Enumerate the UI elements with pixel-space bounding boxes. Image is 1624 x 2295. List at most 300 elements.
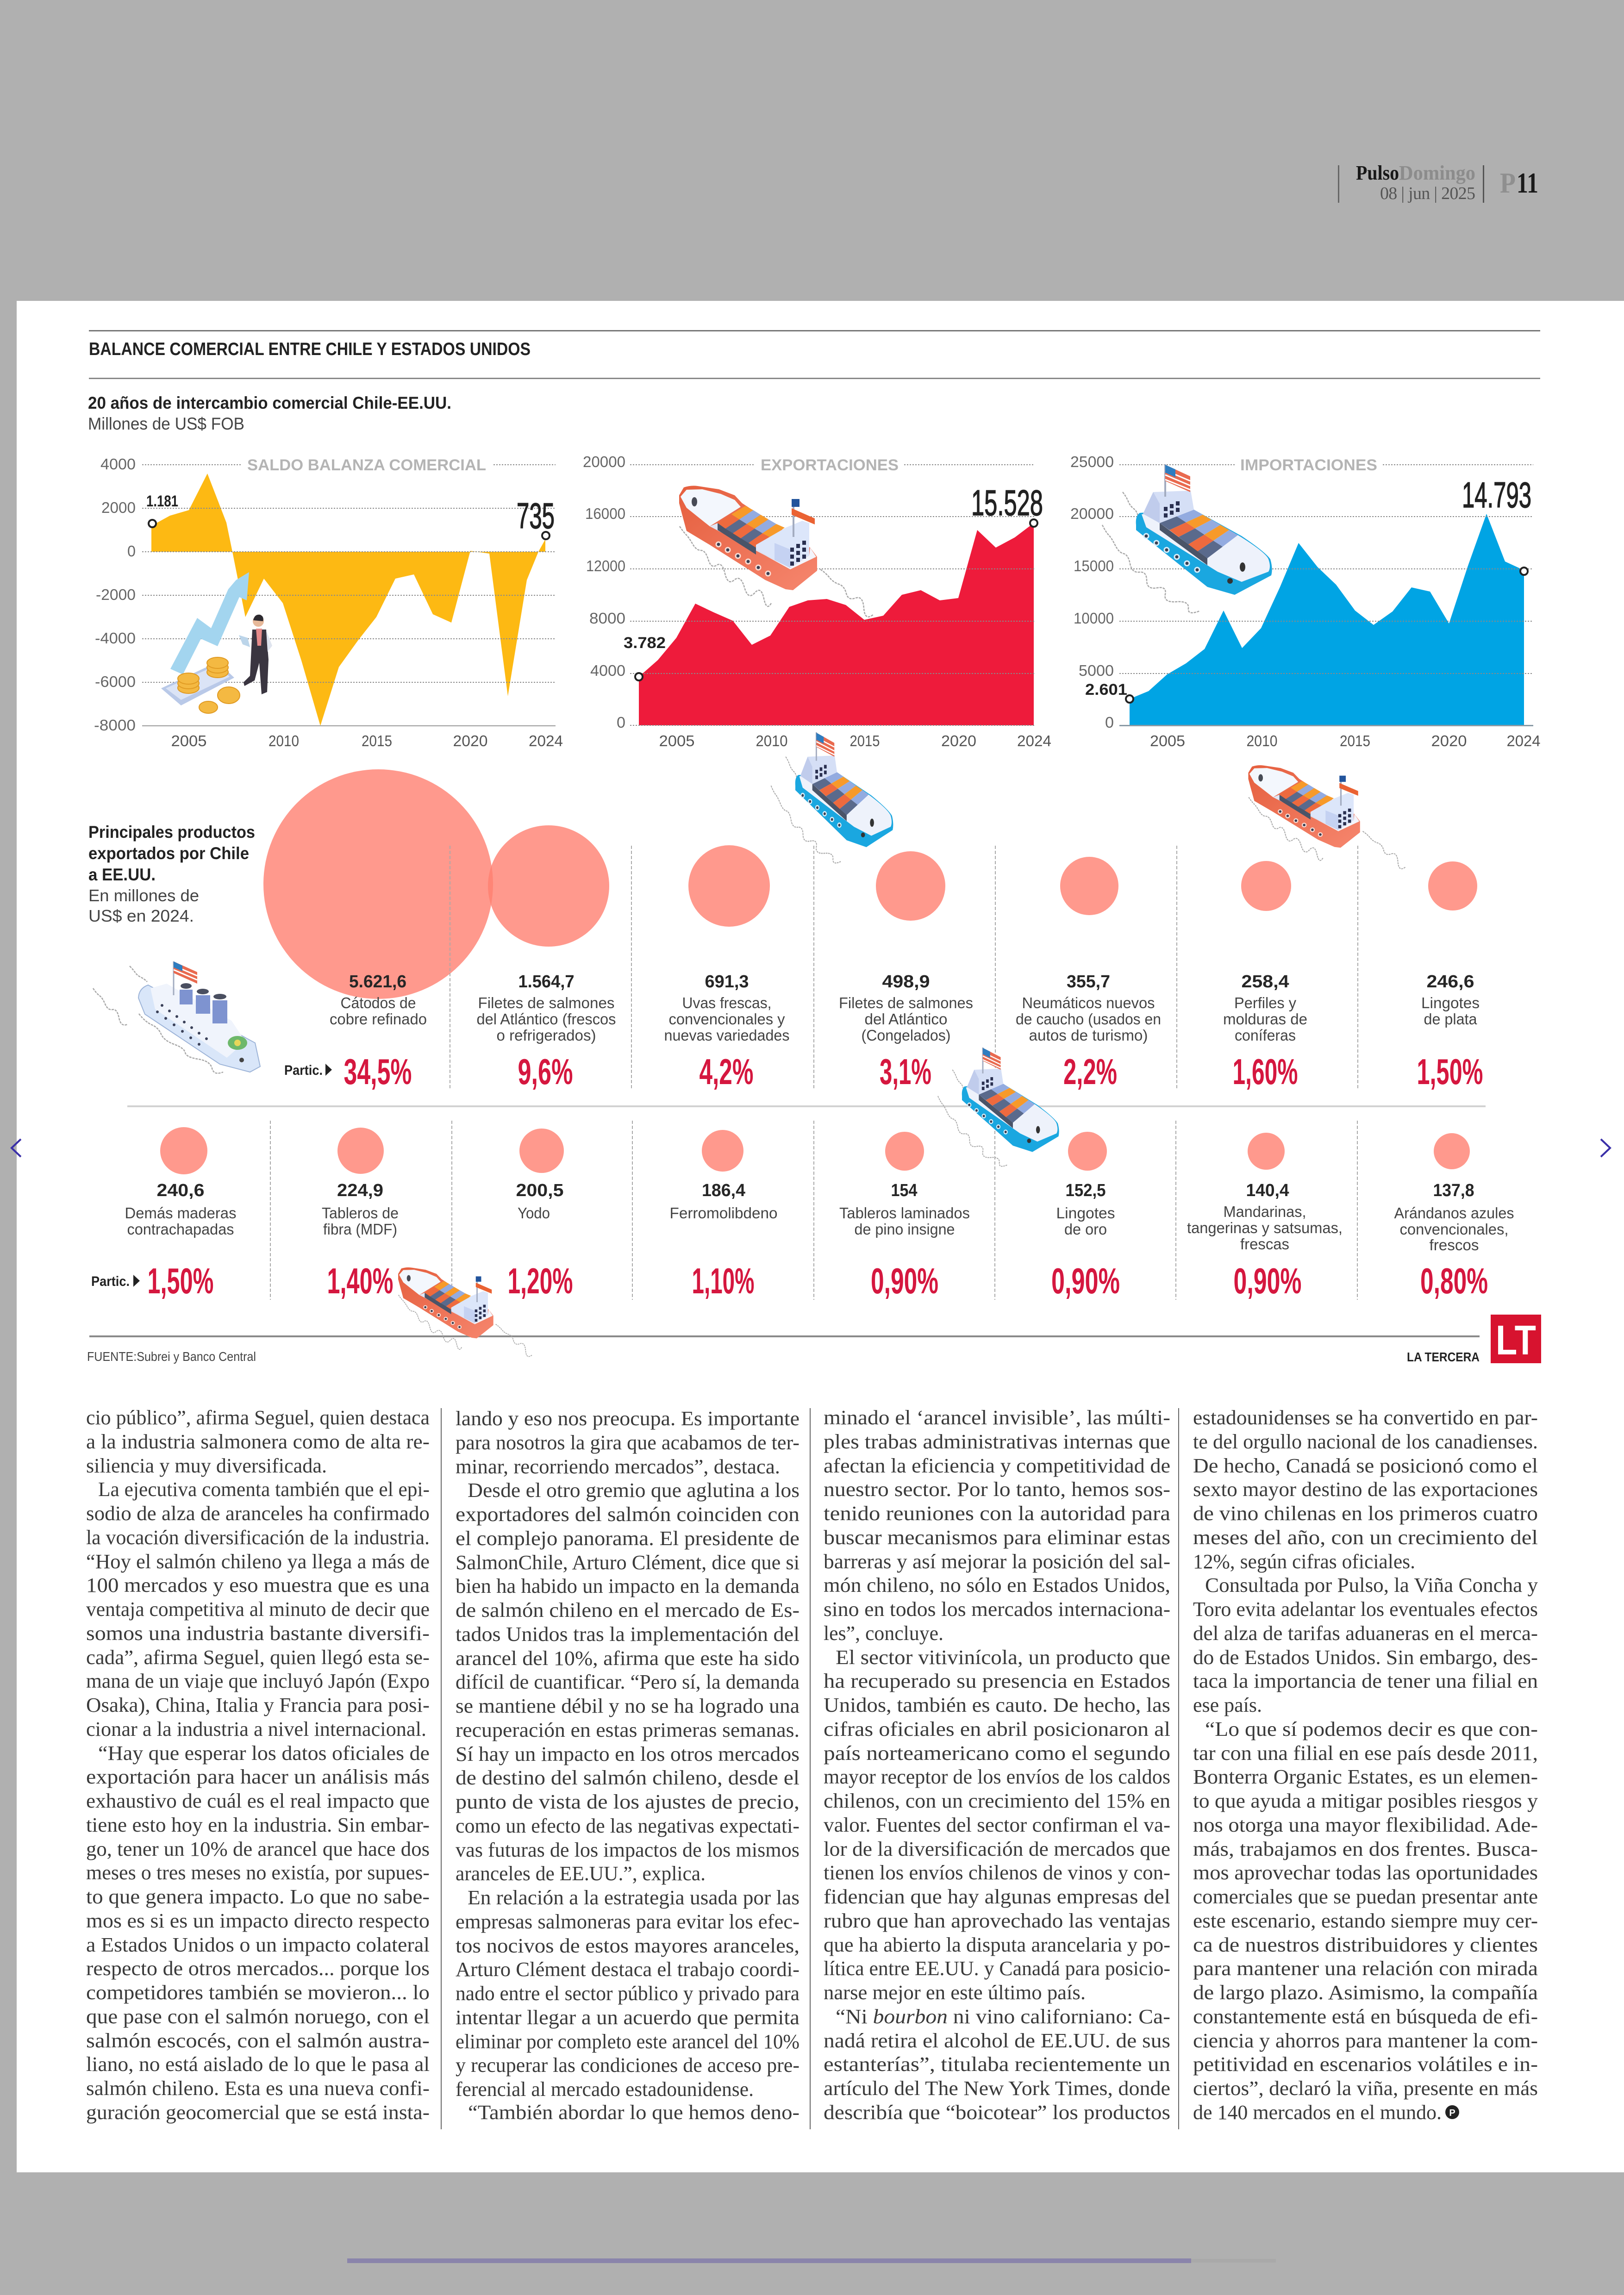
y axis labels: 8000 bbox=[589, 610, 625, 627]
footer rule bbox=[89, 1335, 1480, 1337]
product 10: yodo: 1,20% bbox=[507, 1260, 573, 1301]
article column 3: El sector vitivinícola, un producto que bbox=[836, 1646, 1170, 1669]
product 11: ferromolibdeno: 1,10% bbox=[692, 1260, 755, 1301]
x axis labels: 2005 bbox=[1150, 732, 1185, 749]
chart label: IMPORTACIONES bbox=[1240, 456, 1377, 474]
product 2: salmones frescos: Filetes de salmones bbox=[478, 994, 615, 1011]
x axis labels: 2024 bbox=[529, 732, 563, 749]
product 11: ferromolibdeno bbox=[669, 1130, 778, 1301]
product 12: tableros laminados: 154 bbox=[891, 1181, 918, 1200]
chart: saldo balanza comercial bbox=[94, 455, 563, 749]
article column 2: Desde el otro gremio que aglutina a los bbox=[468, 1479, 800, 1502]
article column 2: minar, recorriendo mercados”, destaca. bbox=[456, 1455, 780, 1478]
product 8: maderas: contrachapadas bbox=[127, 1221, 234, 1238]
icon: businessman, rising arrow and coins bbox=[161, 572, 272, 713]
x axis labels: 2010 bbox=[269, 732, 299, 749]
page progress bar bbox=[347, 2258, 1276, 2263]
article column 2: lando y eso nos preocupa. Es importante bbox=[456, 1407, 800, 1430]
article column 1: salmón chileno. Esta es una nueva confi- bbox=[86, 2077, 430, 2100]
article column 4: De hecho, Canadá se posicionó como el bbox=[1193, 1454, 1538, 1477]
page header: Pulso Domingo: 08 | jun | 2025 bbox=[1380, 184, 1475, 203]
article column 3: lítica entre EE.UU. y Canadá para posicio- bbox=[824, 1957, 1170, 1980]
label: participación row 1: Partic. bbox=[284, 1063, 323, 1078]
article column 3: rubro que han aprovechado las ventajas bbox=[824, 1909, 1170, 1932]
article column 4: ese país. bbox=[1193, 1694, 1262, 1716]
article column 2: de salmón chileno en el mercado de Es- bbox=[456, 1599, 800, 1621]
y axis labels: 25000 bbox=[1070, 453, 1114, 470]
start value 1.181: 1.181 bbox=[146, 493, 178, 510]
article column 3: describía que “boicotear” los productos bbox=[824, 2101, 1170, 2124]
product 13: oro bbox=[1051, 1132, 1120, 1301]
x axis labels: 2024 bbox=[1506, 732, 1541, 749]
article column 1: “Hay que esperar los datos oficiales de bbox=[98, 1742, 430, 1765]
y axis labels bbox=[1070, 453, 1114, 731]
product 5: neumáticos: Neumáticos nuevos bbox=[1022, 994, 1155, 1011]
article column 4: de 140 mercados en el mundo. bbox=[1193, 2101, 1442, 2124]
product 9: MDF: fibra (MDF) bbox=[323, 1221, 397, 1238]
article column 2: empresas salmoneras para evitar los efec- bbox=[456, 1910, 800, 1933]
article column 4: constantemente está en búsqueda de efi- bbox=[1193, 2005, 1538, 2028]
article column 1: a Estados Unidos o un impacto colateral bbox=[86, 1933, 430, 1956]
icon: next page chevron bbox=[1601, 1139, 1610, 1157]
product 14: mandarinas bbox=[1187, 1133, 1343, 1301]
article column 2: Arturo Clément destaca el trabajo coordi- bbox=[456, 1958, 800, 1981]
y axis labels: 4000 bbox=[590, 662, 625, 679]
article column 1: Osaka), China, Italia y Francia para posi- bbox=[86, 1694, 430, 1716]
product 9: MDF: 224,9 bbox=[337, 1181, 383, 1200]
article column 1: “Hoy el salmón chileno ya llega a más de bbox=[86, 1550, 430, 1573]
article column 1: que pase con el salmón noruego, con el bbox=[86, 2005, 430, 2028]
article column 1: la vocación diversificación de la industria. bbox=[86, 1526, 430, 1549]
article column 4: más, trabajamos en dos frentes. Busca- bbox=[1193, 1838, 1538, 1860]
product 7: plata bbox=[1417, 861, 1483, 1092]
product 3: uvas: nuevas variedades bbox=[664, 1027, 790, 1044]
end value 735: 735 bbox=[517, 495, 555, 536]
icon: red container ship, bottom row bbox=[398, 1267, 532, 1357]
product 2: salmones frescos: del Atlántico (frescos bbox=[477, 1010, 616, 1028]
article column 1: mana de un viaje que incluyó Japón (Expo bbox=[86, 1670, 430, 1692]
article column 4: del alza de tarifas aduaneras en el merca- bbox=[1193, 1622, 1538, 1645]
product 15: arándanos: convencionales, bbox=[1400, 1221, 1508, 1238]
product 1: cobre: cobre refinado bbox=[330, 1010, 427, 1028]
product 8: maderas: 240,6 bbox=[156, 1181, 205, 1200]
product 10: yodo bbox=[507, 1129, 573, 1301]
end value 15.528 bbox=[971, 482, 1043, 527]
start value 2.601 bbox=[1085, 681, 1133, 703]
product 1: cobre: Cátodos de bbox=[341, 994, 416, 1011]
article column 3: Unidos, también es cauto. De hecho, las bbox=[824, 1694, 1170, 1716]
article column 2: nado entre el sector público y privado para bbox=[456, 1982, 800, 2005]
icon: previous page chevron bbox=[12, 1139, 21, 1157]
article column 3: chilenos, con un crecimiento del 15% en bbox=[824, 1790, 1170, 1812]
product 15: arándanos: 0,80% bbox=[1420, 1260, 1488, 1301]
chart subtitle: 20 años de intercambio comercial Chile-EE.UU. bbox=[88, 393, 451, 412]
article column 2: intentar llegar a un acuerdo que permita bbox=[456, 2006, 800, 2029]
product 3: uvas: 4,2% bbox=[699, 1051, 754, 1092]
article column 1: cio público”, afirma Seguel, quien destaca bbox=[86, 1406, 430, 1429]
y axis labels: 20000 bbox=[583, 453, 625, 470]
product 4: salmones congelados: del Atlántico bbox=[865, 1010, 947, 1028]
product 1: cobre: 34,5% bbox=[344, 1051, 412, 1092]
article column 4: to que ayuda a mitigar posibles riesgos y bbox=[1193, 1790, 1538, 1812]
article column 4: comerciales que se puedan presentar ante bbox=[1193, 1885, 1538, 1908]
article column 4: “Lo que sí podemos decir es que con- bbox=[1205, 1718, 1538, 1740]
product 13: oro: de oro bbox=[1064, 1221, 1107, 1238]
page header: Pulso Domingo: Domingo bbox=[1399, 162, 1475, 184]
x axis labels: 2020 bbox=[1431, 732, 1467, 749]
article column 2: eliminar por completo este arancel del 10% bbox=[456, 2030, 800, 2053]
article column 1: meses o tres meses no existía, por supues- bbox=[86, 1861, 430, 1884]
article column 4: de largo plazo. Asimismo, la compañía bbox=[1193, 1981, 1538, 2004]
x axis labels: 2005 bbox=[171, 732, 206, 749]
x axis labels bbox=[1150, 732, 1541, 749]
page header: Pulso Domingo bbox=[1338, 162, 1538, 203]
article column 4: Toro evita adelantar los eventuales efectos bbox=[1193, 1598, 1538, 1621]
product 11: ferromolibdeno: 186,4 bbox=[702, 1181, 745, 1200]
article column 3: fidencian que hay algunas empresas del bbox=[824, 1885, 1170, 1908]
article column 1: somos una industria bastante diversifi- bbox=[86, 1622, 430, 1645]
article column 2: exportadores del salmón coinciden con bbox=[456, 1503, 800, 1526]
product 12: tableros laminados bbox=[839, 1132, 970, 1301]
product 2: salmones frescos: o refrigerados) bbox=[496, 1027, 596, 1044]
article column 3: país norteamericano como el segundo bbox=[824, 1742, 1170, 1765]
article column 4: de vino chilenas en los primeros cuatro bbox=[1193, 1502, 1538, 1525]
y axis labels: 2000 bbox=[101, 499, 136, 516]
article column 1: a la industria salmonera como de alta re- bbox=[86, 1430, 430, 1453]
product 5: neumáticos: autos de turismo) bbox=[1029, 1027, 1148, 1044]
product 9: MDF: 1,40% bbox=[327, 1260, 394, 1301]
article column 3: sino en todos los mercados internaciona- bbox=[824, 1598, 1170, 1621]
article column 1: mos es si es un impacto directo respecto bbox=[86, 1909, 430, 1932]
product 12: tableros laminados: 0,90% bbox=[871, 1260, 938, 1301]
article column 1: sodio de alza de aranceles ha confirmado bbox=[86, 1502, 430, 1525]
products intro text: a EE.UU. bbox=[88, 865, 156, 884]
article column 3: “Ni bourbon ni vino californiano: Ca- bbox=[836, 2005, 1170, 2028]
start value 3.782 bbox=[624, 634, 666, 680]
start value 2.601: 2.601 bbox=[1085, 681, 1127, 698]
article column 2: “También abordar lo que hemos deno- bbox=[468, 2101, 800, 2124]
article column 3: valor. Fuentes del sector confirman el va- bbox=[824, 1814, 1170, 1836]
article column 4: petitividad en escenarios volátiles e in- bbox=[1193, 2053, 1538, 2076]
chart subtitle: Millones de US$ FOB bbox=[88, 414, 244, 433]
y axis labels: 0 bbox=[617, 714, 625, 731]
y axis labels: 0 bbox=[127, 543, 136, 560]
product 5: neumáticos: 2,2% bbox=[1063, 1051, 1117, 1092]
page header: Pulso Domingo: P bbox=[1500, 168, 1516, 199]
y axis labels: 12000 bbox=[586, 557, 625, 574]
icon: blue container ship on imports chart bbox=[1102, 464, 1272, 613]
article column 3: les”, concluye. bbox=[824, 1622, 943, 1645]
products intro text: En millones de bbox=[88, 886, 199, 905]
icon: blue container ship, top middle bbox=[771, 732, 893, 863]
x axis labels: 2015 bbox=[1340, 732, 1370, 749]
article column 3 bbox=[824, 1406, 1170, 2124]
product 2: salmones frescos: 1.564,7 bbox=[518, 972, 574, 992]
product 11: ferromolibdeno: Ferromolibdeno bbox=[669, 1204, 778, 1222]
article column 3: que ha abierto la disputa arancelaria y po- bbox=[824, 1933, 1170, 1956]
product 6: perfiles bbox=[1223, 861, 1307, 1092]
article column 1: go, tener un 10% de arancel que hace dos bbox=[86, 1838, 430, 1860]
y axis labels: 5000 bbox=[1079, 662, 1114, 679]
article column 2: el complejo panorama. El presidente de bbox=[456, 1527, 800, 1550]
article column 1: La ejecutiva comenta también que el epi- bbox=[98, 1478, 430, 1501]
article column 3: barreras y así mejorar la posición del sal- bbox=[824, 1550, 1170, 1573]
product 14: mandarinas: frescas bbox=[1240, 1235, 1289, 1253]
section heading with rules bbox=[89, 330, 1540, 379]
article column 3: cifras oficiales en abril posicionaron al bbox=[824, 1718, 1170, 1740]
article column 3: ha recuperado su presencia en Estados bbox=[824, 1670, 1170, 1692]
article column 2 bbox=[456, 1407, 800, 2124]
y axis labels: 16000 bbox=[585, 505, 625, 522]
product 14: mandarinas: 0,90% bbox=[1233, 1260, 1302, 1301]
area: exportaciones bbox=[639, 523, 1034, 725]
article column 1: liano, no está aislado de lo que le pasa al bbox=[86, 2053, 430, 2076]
y axis labels bbox=[583, 453, 625, 731]
product 6: perfiles: coníferas bbox=[1235, 1027, 1296, 1044]
product 8: maderas: 1,50% bbox=[147, 1260, 214, 1301]
x axis labels: 2005 bbox=[659, 732, 694, 749]
article column 4: nos otorga una mayor flexibilidad. Ade- bbox=[1193, 1814, 1538, 1836]
article column 1: respecto de otros mercados... porque los bbox=[86, 1957, 430, 1980]
x axis labels: 2024 bbox=[1017, 732, 1051, 749]
article column 4: ca de nuestros distribuidores y clientes bbox=[1193, 1933, 1538, 1956]
article column 2: difícil de cuantificar. “Pero sí, la demanda bbox=[456, 1671, 800, 1693]
article column 1: to que genera impacto. Lo que no sabe- bbox=[86, 1885, 430, 1908]
article column 4: mos aprovechar todas las oportunidades bbox=[1193, 1861, 1538, 1884]
end-of-article mark bbox=[1445, 2105, 1459, 2119]
article column 4: taca la importancia de tener una filial en bbox=[1193, 1670, 1538, 1692]
icon: blue container ship, between rows bbox=[938, 1048, 1059, 1166]
chart: importaciones bbox=[1070, 453, 1541, 749]
icon: cruise ship bbox=[93, 961, 260, 1073]
product 13: oro: 0,90% bbox=[1051, 1260, 1120, 1301]
product 5: neumáticos: de caucho (usados en bbox=[1016, 1010, 1161, 1028]
article column 1: exportación para hacer un análisis más bbox=[86, 1765, 430, 1788]
bubble: cátodos de cobre bbox=[263, 769, 493, 999]
article column 4: este escenario, estando siempre muy cer- bbox=[1193, 1909, 1538, 1932]
y axis labels: 20000 bbox=[1070, 505, 1114, 522]
icon: red container ship, top right bbox=[1248, 765, 1405, 869]
product 9: MDF: Tableros de bbox=[322, 1204, 399, 1222]
products intro text bbox=[88, 823, 255, 925]
product 12: tableros laminados: de pino insigne bbox=[855, 1221, 955, 1238]
end value 14.793 bbox=[1462, 474, 1531, 575]
product 3: uvas: 691,3 bbox=[705, 972, 749, 992]
product 8: maderas bbox=[125, 1127, 236, 1301]
article column 4: ciencia y ahorros para mantener la com- bbox=[1193, 2029, 1538, 2052]
product 3: uvas bbox=[664, 845, 790, 1092]
product 7: plata: de plata bbox=[1424, 1010, 1477, 1028]
x axis labels: 2015 bbox=[362, 732, 392, 749]
article column 4: do de Estados Unidos. Sin embargo, des- bbox=[1193, 1646, 1538, 1669]
article column 4: meses del año, con un crecimiento del bbox=[1193, 1526, 1538, 1549]
product 7: plata: Lingotes bbox=[1421, 994, 1480, 1011]
article column 1 bbox=[86, 1406, 430, 2124]
article column 3: mayor receptor de los envíos de los caldos bbox=[824, 1765, 1170, 1788]
y axis labels: -6000 bbox=[95, 673, 136, 690]
product 3: uvas: Uvas frescas, bbox=[682, 994, 771, 1011]
article column 1: competidores también se movieron... lo bbox=[86, 1981, 430, 2004]
product 7: plata: 1,50% bbox=[1417, 1051, 1483, 1092]
product 4: salmones congelados: 498,9 bbox=[882, 972, 930, 992]
article column 3: artículo del The New York Times, donde bbox=[824, 2077, 1170, 2100]
x axis labels: 2020 bbox=[453, 732, 488, 749]
product 2: salmones frescos: 9,6% bbox=[518, 1051, 573, 1092]
product 14: mandarinas: 140,4 bbox=[1246, 1181, 1289, 1200]
article column 3: buscar mecanismos para eliminar estas bbox=[824, 1526, 1170, 1549]
column dividers bbox=[441, 1408, 1179, 2129]
product 5: neumáticos: 355,7 bbox=[1067, 972, 1110, 992]
product 15: arándanos: Arándanos azules bbox=[1394, 1204, 1514, 1222]
article column 2: y recuperar las condiciones de acceso pre- bbox=[456, 2054, 800, 2077]
article column 3: ples trabas administrativas internas que bbox=[824, 1430, 1170, 1453]
article column 4 bbox=[1193, 1406, 1538, 2124]
article column 2: recuperación en estas primeras semanas. bbox=[456, 1719, 800, 1741]
product 1: cobre: 5.621,6 bbox=[349, 972, 406, 992]
source credit: FUENTE:Subrei y Banco Central bbox=[87, 1349, 256, 1364]
article column 1: 100 mercados y eso muestra que es una bbox=[86, 1574, 430, 1597]
article column 3: minado el ‘arancel invisible’, las múlti- bbox=[824, 1406, 1170, 1429]
chart label: SALDO BALANZA COMERCIAL bbox=[247, 456, 486, 474]
article column 1: cionar a la industria a nivel internacional. bbox=[86, 1718, 426, 1740]
product 5: neumáticos bbox=[1016, 857, 1161, 1092]
product 10: yodo: 200,5 bbox=[516, 1181, 564, 1200]
article column 2: En relación a la estrategia usada por las bbox=[468, 1886, 800, 1909]
product 7: plata: 246,6 bbox=[1427, 972, 1474, 992]
product 6: perfiles: Perfiles y bbox=[1234, 994, 1296, 1011]
article column 2: se mantiene débil y no se ha logrado una bbox=[456, 1695, 800, 1717]
label: participación row 2: Partic. bbox=[91, 1274, 130, 1289]
page header: Pulso Domingo: 11 bbox=[1517, 168, 1538, 199]
article column 2: aranceles de EE.UU.”, explica. bbox=[456, 1862, 706, 1885]
product 4: salmones congelados: 3,1% bbox=[880, 1051, 931, 1092]
icon: red container ship on exports chart bbox=[679, 486, 873, 617]
product 13: oro: 152,5 bbox=[1066, 1181, 1106, 1200]
article column 1: exhaustivo de cuál es el real impacto que bbox=[86, 1790, 430, 1812]
article column 1: siliencia y muy diversificada. bbox=[86, 1454, 327, 1477]
product 4: salmones congelados bbox=[839, 851, 973, 1092]
y axis labels: -4000 bbox=[95, 630, 136, 647]
logo: LT: LT bbox=[1496, 1317, 1536, 1364]
article column 4: 12%, según cifras oficiales. bbox=[1193, 1550, 1415, 1573]
product 15: arándanos: 137,8 bbox=[1433, 1181, 1474, 1200]
chart subtitle bbox=[88, 393, 451, 433]
article column 2: tos nocivos de estos mayores aranceles, bbox=[456, 1934, 800, 1957]
products intro text: Principales productos bbox=[88, 823, 255, 842]
products intro text: exportados por Chile bbox=[88, 844, 249, 863]
article column 2: SalmonChile, Arturo Clément, dice que si bbox=[456, 1551, 800, 1574]
article column 2: para nosotros la gira que acabamos de ter- bbox=[456, 1431, 800, 1454]
product 4: salmones congelados: (Congelados) bbox=[861, 1027, 951, 1044]
y axis labels: -2000 bbox=[96, 586, 136, 603]
article column 3: tienen los envíos chilenos de vinos y con- bbox=[824, 1861, 1170, 1884]
chart label: EXPORTACIONES bbox=[761, 456, 899, 474]
article column 2: Sí hay un impacto en los otros mercados bbox=[456, 1743, 800, 1765]
article column 4: Consultada por Pulso, la Viña Concha y bbox=[1205, 1574, 1538, 1597]
article column 4: sexto mayor destino de las exportaciones bbox=[1193, 1478, 1538, 1501]
article column 1: ventaja competitiva al minuto de decir que bbox=[86, 1598, 430, 1621]
product 6: perfiles: 258,4 bbox=[1242, 972, 1289, 992]
product 14: mandarinas: tangerinas y satsumas, bbox=[1187, 1219, 1343, 1236]
product 15: arándanos bbox=[1394, 1133, 1514, 1301]
article column 2: bien ha habido un impacto en la demanda bbox=[456, 1575, 800, 1597]
x axis labels bbox=[659, 732, 1051, 749]
start value 3.782: 3.782 bbox=[624, 634, 666, 652]
end-of-article mark: P bbox=[1449, 2108, 1455, 2118]
article column 2: de destino del salmón chileno, desde el bbox=[456, 1766, 800, 1789]
article column 4: para mantener una relación con mirada bbox=[1193, 1957, 1538, 1980]
page header: Pulso Domingo: Pulso bbox=[1356, 162, 1399, 184]
article column 4: estadounidenses se ha convertido en par- bbox=[1193, 1406, 1538, 1429]
article column 3: estanterías”, titulaba recientemente un bbox=[824, 2053, 1170, 2076]
area: importaciones bbox=[1130, 514, 1524, 725]
product 12: tableros laminados: Tableros laminados bbox=[839, 1204, 970, 1222]
product 8: maderas: Demás maderas bbox=[125, 1204, 236, 1222]
article column 3: narse mejor en este último país. bbox=[824, 1981, 1086, 2004]
article column 2: ferencial al mercado estadounidense. bbox=[456, 2078, 754, 2101]
article column 3: afectan la eficiencia y competitividad de bbox=[824, 1454, 1170, 1477]
article column 2: arancel del 10%, afirma que este ha sido bbox=[456, 1647, 800, 1670]
x axis labels: 2010 bbox=[1246, 732, 1278, 749]
article column 1: tiene esto hoy en la industria. Sin embar- bbox=[86, 1814, 430, 1836]
product 2: salmones frescos bbox=[477, 972, 616, 1092]
credit: La Tercera: LA TERCERA bbox=[1407, 1350, 1480, 1364]
product 15: arándanos: frescos bbox=[1430, 1236, 1479, 1254]
article column 4: Bonterra Organic Estates, es un elemen- bbox=[1193, 1765, 1538, 1788]
article column 4: tar con una filial en ese país desde 2011, bbox=[1193, 1742, 1538, 1765]
x axis labels: 2020 bbox=[941, 732, 976, 749]
article column 1: guración geocomercial que se está insta- bbox=[86, 2101, 430, 2124]
x axis labels: 2010 bbox=[756, 732, 788, 749]
article column 4: te del orgullo nacional de los canadienses. bbox=[1193, 1430, 1538, 1453]
y axis labels: 15000 bbox=[1074, 557, 1114, 574]
end value 15.528: 15.528 bbox=[971, 482, 1043, 523]
bubble: filetes de salmones frescos bbox=[488, 825, 609, 947]
products intro text: US$ en 2024. bbox=[88, 906, 194, 925]
product 4: salmones congelados: Filetes de salmones bbox=[839, 994, 973, 1011]
y axis labels: 0 bbox=[1105, 714, 1114, 731]
article column 1: cada”, afirma Seguel, quien llegó esta se- bbox=[86, 1646, 430, 1669]
article column 3: tenido reuniones con la autoridad para bbox=[824, 1502, 1170, 1525]
article column 3: lor de la diversificación de mercados que bbox=[824, 1838, 1170, 1860]
article column 3: nuestro sector. Por lo tanto, hemos sos- bbox=[824, 1478, 1170, 1501]
product 10: yodo: Yodo bbox=[518, 1204, 550, 1222]
article column 3: nadá retira el alcohol de EE.UU. de sus bbox=[824, 2029, 1170, 2052]
area: saldo bbox=[151, 474, 545, 726]
section heading with rules: BALANCE COMERCIAL ENTRE CHILE Y ESTADOS UNIDOS bbox=[89, 339, 531, 359]
y axis labels: 10000 bbox=[1074, 610, 1114, 627]
chart: exportaciones bbox=[583, 453, 1051, 749]
end value 735 bbox=[517, 495, 555, 539]
article column 2: punto de vista de los ajustes de precio, bbox=[456, 1790, 800, 1813]
product 9: MDF bbox=[322, 1128, 399, 1301]
end value 14.793: 14.793 bbox=[1462, 474, 1531, 515]
article column 4: ciertos”, declaró la viña, presente en más bbox=[1193, 2077, 1538, 2100]
y axis labels bbox=[94, 455, 136, 734]
product 13: oro: Lingotes bbox=[1056, 1204, 1115, 1222]
article column 2: como un efecto de las negativas expectati- bbox=[456, 1815, 800, 1837]
product 6: perfiles: molduras de bbox=[1223, 1010, 1307, 1028]
product 3: uvas: convencionales y bbox=[668, 1010, 785, 1028]
product 1: cobre bbox=[330, 972, 427, 1092]
product 14: mandarinas: Mandarinas, bbox=[1223, 1203, 1306, 1220]
y axis labels: -8000 bbox=[94, 717, 136, 734]
article column 2: vas futuras de los impactos de los mismos bbox=[456, 1839, 800, 1861]
article column 1: salmón escocés, con el salmón austra- bbox=[86, 2029, 430, 2052]
y axis labels: 4000 bbox=[100, 455, 136, 473]
x axis labels bbox=[171, 732, 563, 749]
start value 1.181 bbox=[146, 493, 178, 527]
